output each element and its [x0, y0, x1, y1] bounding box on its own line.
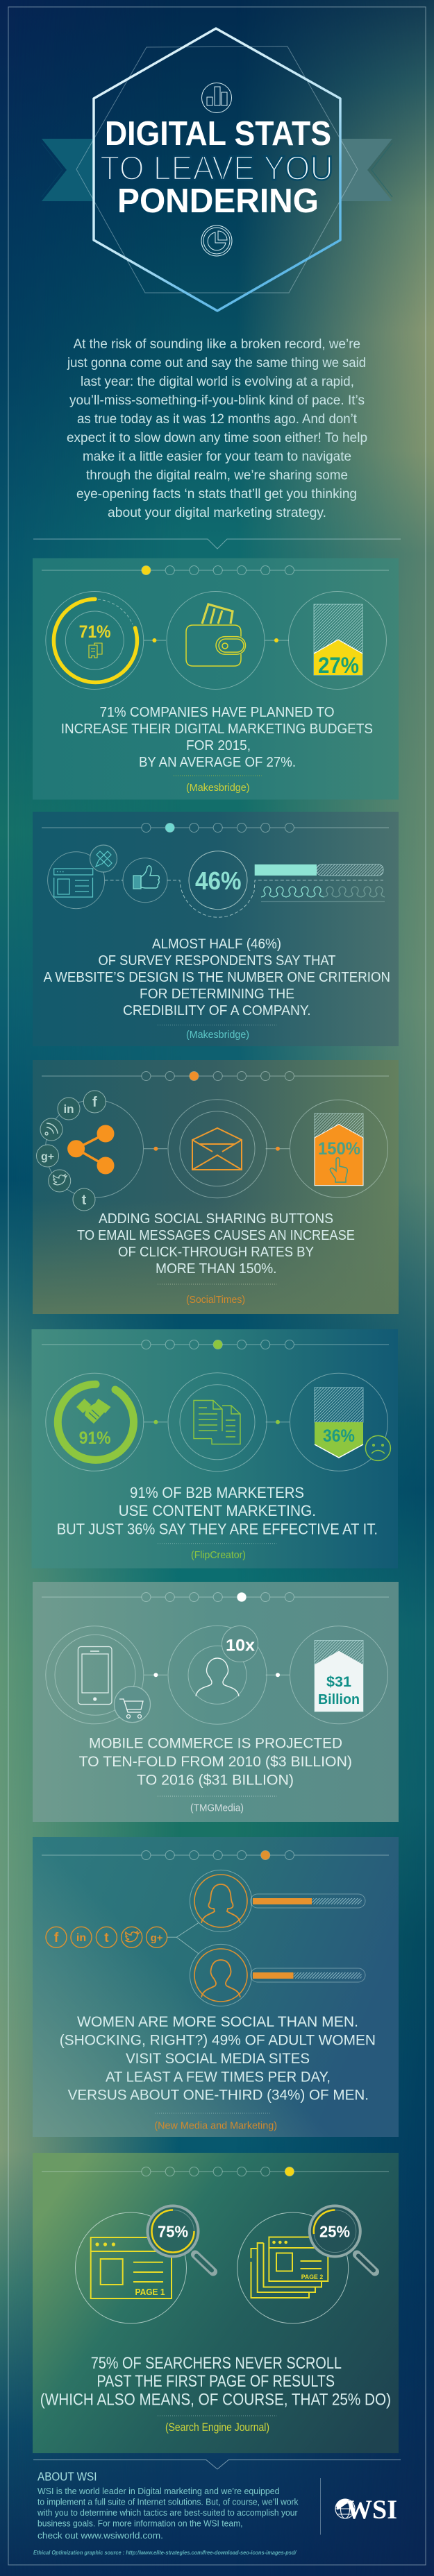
bar: $31 billion — [290, 1626, 387, 1724]
icon: person with 10x — [168, 1626, 267, 1724]
panel 7: search results — [33, 2153, 399, 2453]
social icons row: g+ — [151, 1932, 163, 1944]
intro paragraph: about your digital marketing strategy. — [108, 506, 326, 520]
about body: with you to determine which tactics are best-suited to accomplish your — [37, 2507, 298, 2518]
panel background — [33, 1837, 399, 2137]
statement text: FOR 2015, — [186, 738, 251, 753]
bar: 150% — [290, 1100, 387, 1197]
icon: cart — [114, 1687, 150, 1723]
ribbon right — [340, 139, 392, 201]
icon: person with 10x: 10x — [226, 1636, 256, 1655]
bar: $31 billion: $31 — [326, 1674, 351, 1690]
source: (Makesbridge) — [186, 783, 250, 794]
statement text: CREDIBILITY OF A COMPANY. — [123, 1003, 311, 1018]
statement text — [61, 705, 373, 770]
icon: browser — [48, 852, 105, 909]
panel 6: women vs men — [33, 1837, 399, 2137]
source: (TMGMedia) — [190, 1802, 244, 1814]
statement text: TO TEN-FOLD FROM 2010 ($3 BILLION) — [79, 1754, 352, 1770]
statement text: VISIT SOCIAL MEDIA SITES — [126, 2051, 310, 2067]
bar: 27%: 27% — [318, 653, 359, 678]
bar: $31 billion: Billion — [318, 1692, 360, 1707]
social network ring: g+ — [41, 1151, 54, 1163]
icon: envelope — [168, 1100, 267, 1198]
magnifier 75% — [147, 2206, 213, 2271]
divider with notch — [33, 539, 401, 549]
icon: bar chart — [201, 83, 232, 112]
statement text: PAST THE FIRST PAGE OF RESULTS — [97, 2372, 335, 2391]
statement text — [79, 1735, 352, 1789]
stat circle: 46%: 46% — [195, 867, 242, 895]
ring: 71% — [46, 591, 144, 690]
source: (SocialTimes) — [186, 1295, 245, 1306]
about body: business goals. For more information on the WSI team, — [37, 2518, 243, 2528]
title: pondering: PONDERING — [117, 182, 319, 220]
statement text: AT LEAST A FEW TIMES PER DAY, — [106, 2069, 331, 2085]
icon: thumbs up — [105, 858, 383, 917]
statement text: VERSUS ABOUT ONE-THIRD (34%) OF MEN. — [68, 2088, 369, 2104]
page 1 icon — [75, 2212, 186, 2323]
source — [174, 776, 262, 794]
intro paragraph: expect it to slow down any time soon either! To help — [67, 431, 367, 445]
statement text: BUT JUST 36% SAY THEY ARE EFFECTIVE AT IT. — [57, 1521, 378, 1538]
social network ring: t — [82, 1193, 87, 1208]
panel background — [33, 1060, 399, 1314]
timeline — [42, 823, 389, 833]
WSI logo: WSI — [346, 2495, 397, 2525]
timeline — [42, 566, 389, 574]
panel 3: social sharing — [33, 1060, 399, 1314]
social network ring: f — [92, 1095, 97, 1110]
statement text — [44, 937, 390, 1018]
ribbon left — [42, 139, 93, 201]
timeline — [42, 1851, 389, 1859]
stat circle: 46% — [189, 851, 247, 910]
timeline — [42, 2167, 389, 2176]
panel background — [33, 812, 399, 1046]
male figure and bar — [190, 1944, 365, 2006]
timeline — [42, 1340, 389, 1349]
icon: wallet — [167, 591, 265, 690]
about heading: ABOUT WSI — [37, 2470, 97, 2484]
page 2 icon stack: PAGE 2 — [301, 2274, 323, 2281]
source: (New Media and Marketing) — [154, 2120, 277, 2131]
panel 4: content marketing — [32, 1329, 398, 1568]
intro paragraph: just gonna come out and say the same thing we said — [67, 356, 366, 370]
intro paragraph: as true today as it was 12 months ago. And don’t — [77, 412, 358, 427]
panel 2: website design — [33, 812, 399, 1046]
intro paragraph: eye-opening facts ‘n stats that’ll get you thinking — [76, 487, 357, 502]
ring: 91%: 91% — [79, 1428, 111, 1448]
social icons row: in — [76, 1932, 86, 1944]
female figure and bar — [190, 1870, 365, 1932]
ring: 71%: 71% — [79, 622, 111, 642]
timeline — [42, 1593, 389, 1601]
statement text — [40, 2354, 391, 2409]
panel background — [33, 2153, 399, 2453]
about body: check out www.wsiworld.com. — [37, 2530, 163, 2541]
graphic source credit: Ethical Optimization graphic source : http://www.elite-strategies.com/free-download-seo-icons-images-psd/ — [33, 2549, 297, 2556]
statement text: OF CLICK-THROUGH RATES BY — [118, 1244, 314, 1260]
connector — [266, 1673, 290, 1677]
statement text: OF SURVEY RESPONDENTS SAY THAT — [99, 953, 336, 969]
statement text — [60, 2014, 376, 2104]
title: to leave you: TO LEAVE YOU — [100, 150, 333, 187]
statement text — [57, 1484, 378, 1538]
ring: 91% — [46, 1373, 144, 1471]
intro paragraph — [67, 337, 367, 520]
social icons row: f — [54, 1931, 59, 1945]
bar: 27% — [289, 591, 386, 690]
panel background — [33, 558, 399, 799]
page 1 icon: PAGE 1 — [135, 2287, 165, 2297]
source: (Makesbridge) — [186, 1030, 249, 1041]
about WSI — [37, 2470, 299, 2541]
title: digital stats: DIGITAL STATS — [105, 115, 331, 153]
connector — [144, 1673, 167, 1677]
statement text: TO EMAIL MESSAGES CAUSES AN INCREASE — [77, 1227, 355, 1243]
social icons row: t — [104, 1931, 109, 1945]
icon: pencil and ruler — [90, 845, 117, 872]
icon: pie chart — [201, 225, 232, 256]
statement text: BY AN AVERAGE OF 27%. — [139, 755, 296, 770]
icon: sad face — [365, 1435, 390, 1460]
bar: 36%: 36% — [323, 1426, 355, 1446]
magnifier 75%: 75% — [158, 2223, 188, 2241]
branch lines — [167, 1922, 199, 1954]
social icons row — [46, 1927, 167, 1947]
connector — [144, 638, 166, 642]
divider with notch — [33, 2460, 401, 2469]
panel 1: budgets — [33, 558, 399, 799]
connector — [265, 638, 289, 642]
connector — [266, 1147, 290, 1151]
statement text: FOR DETERMINING THE — [140, 987, 294, 1002]
statement text: WOMEN ARE MORE SOCIAL THAN MEN. — [77, 2014, 358, 2030]
bar: 150%: 150% — [318, 1139, 360, 1159]
about body: WSI is the world leader in Digital marketing and we’re equipped — [37, 2486, 280, 2496]
panel 5: mobile commerce — [33, 1582, 399, 1822]
icon: share — [68, 1125, 114, 1174]
bar: 36% — [290, 1373, 387, 1471]
about body — [37, 2486, 299, 2541]
connector — [144, 1420, 167, 1424]
statement text: ALMOST HALF (46%) — [152, 937, 281, 952]
statement text — [77, 1211, 355, 1277]
icon: documents — [168, 1373, 267, 1472]
thin inner hexagon — [76, 46, 358, 293]
magnifier 25%: 25% — [319, 2223, 350, 2241]
statement text: ADDING SOCIAL SHARING BUTTONS — [99, 1211, 333, 1227]
statement text: USE CONTENT MARKETING. — [119, 1502, 316, 1519]
statement text: (SHOCKING, RIGHT?) 49% OF ADULT WOMEN — [60, 2033, 376, 2049]
intro paragraph: last year: the digital world is evolving at a rapid, — [81, 375, 354, 389]
progress bar — [255, 864, 383, 876]
panel background — [33, 1582, 399, 1822]
statement text: MOBILE COMMERCE IS PROJECTED — [89, 1735, 342, 1751]
intro paragraph: you’ll-miss-something-if-you-blink kind of pace. It’s — [69, 393, 365, 408]
statement text: MORE THAN 150%. — [156, 1261, 276, 1277]
thick outer hexagon — [94, 28, 340, 311]
statement text: A WEBSITE’S DESIGN IS THE NUMBER ONE CRITERION — [44, 970, 390, 985]
connector — [144, 1147, 167, 1151]
statement text: 71% COMPANIES HAVE PLANNED TO — [100, 705, 335, 720]
intro paragraph: At the risk of sounding like a broken record, we’re — [74, 337, 360, 352]
statement text: 75% OF SEARCHERS NEVER SCROLL — [91, 2354, 342, 2373]
statement text: 91% OF B2B MARKETERS — [130, 1484, 304, 1501]
intro paragraph: make it a little easier for your team to navigate — [83, 450, 351, 464]
panel background — [32, 1329, 398, 1568]
magnifier 25% — [310, 2206, 375, 2271]
connector — [266, 1420, 290, 1424]
icon: tablet — [46, 1626, 144, 1724]
vertical divider — [319, 2478, 321, 2535]
source: (Search Engine Journal) — [165, 2421, 269, 2434]
source: (FlipCreator) — [191, 1550, 246, 1561]
page 2 icon stack — [237, 2212, 349, 2323]
statement text: TO 2016 ($31 BILLION) — [137, 1773, 294, 1789]
statement text: INCREASE THEIR DIGITAL MARKETING BUDGETS — [61, 722, 373, 737]
about body: to implement a full suite of Internet solutions. But, of course, we’ll work — [37, 2496, 299, 2507]
social network ring — [36, 1091, 143, 1211]
people row — [261, 887, 385, 902]
intro paragraph: through the digital realm, we’re sharing some — [86, 468, 348, 483]
social network ring: in — [63, 1102, 74, 1116]
timeline — [42, 1071, 389, 1081]
title badge — [42, 28, 392, 311]
